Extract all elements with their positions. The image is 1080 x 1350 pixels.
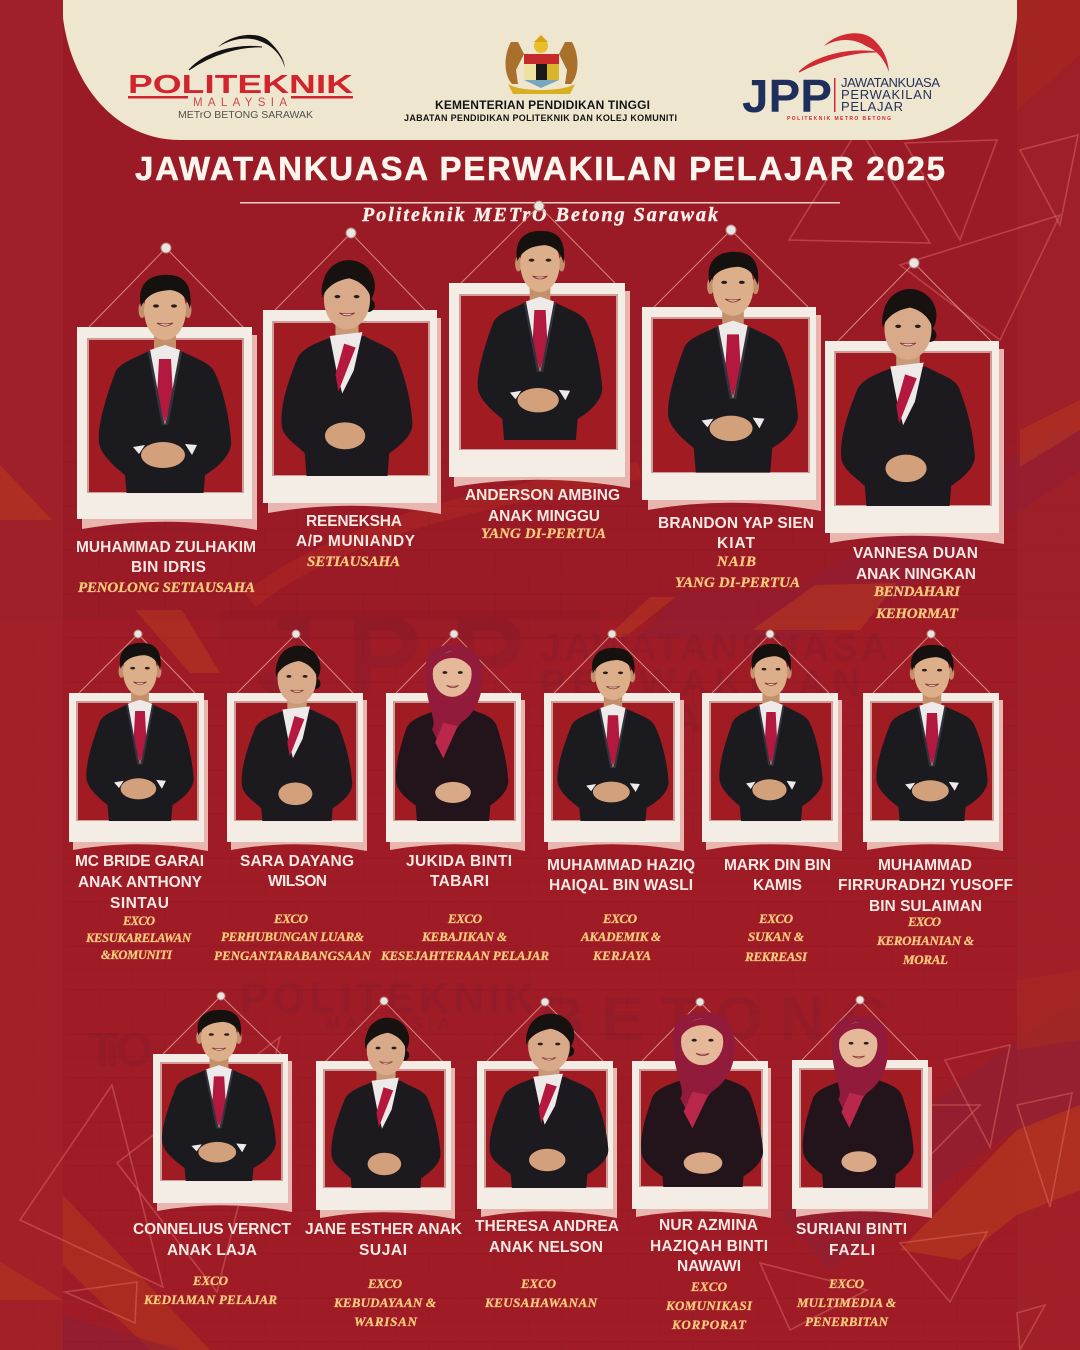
logo: JPP: [742, 33, 940, 122]
ministry text: JABATAN PENDIDIKAN POLITEKNIK DAN KOLEJ KOMUNITI: [404, 113, 677, 123]
logo: Politeknik Malaysia: [128, 35, 353, 121]
member: MC Bride Garai: EXCO: [122, 914, 155, 928]
member: Mark Din Bin Kamis: [702, 630, 842, 964]
logo: JPP: PELAJAR: [841, 99, 903, 114]
member: Jane Esther: EXCO: [367, 1276, 403, 1291]
member: Reeneksha: [263, 228, 441, 570]
member: Muhammad Zulhakim: [76, 243, 257, 596]
member: Mark Din Bin Kamis: MARK DIN BIN: [724, 857, 831, 874]
member: Jane Esther: KEBUDAYAAN &: [333, 1295, 436, 1310]
watermark: JPP logo: JPP: [255, 594, 525, 719]
member: Muhammad Zulhakim: PENOLONG SETIAUSAHA: [78, 580, 255, 596]
member: Reeneksha: A/P MUNIANDY: [296, 533, 416, 550]
member: MC Bride Garai: [69, 630, 208, 962]
member: Connelius Vernct: [133, 992, 292, 1307]
member: Muhammad Firruradhzi: BIN SULAIMAN: [869, 898, 982, 915]
member: Jukida Binti Tabari: JUKIDA BINTI: [406, 853, 512, 870]
title divider: [240, 202, 840, 204]
member: Anderson Ambing: YANG DI-PERTUA: [481, 526, 606, 542]
member: Anderson Ambing: ANDERSON AMBING: [465, 487, 620, 504]
member: Brandon Yap Sien Kiat: BRANDON YAP SIEN: [658, 515, 814, 532]
member: Anderson Ambing: ANAK MINGGU: [488, 508, 600, 525]
member: Muhammad Firruradhzi: [838, 630, 1013, 967]
member: Sara Dayang Wilson: PERHUBUNGAN LUAR&: [221, 929, 364, 944]
member: Sara Dayang Wilson: EXCO: [273, 911, 309, 926]
subtitle: Politeknik METrO Betong Sarawak: [361, 204, 718, 226]
logo: JPP: POLITEKNIK METRO BETONG: [787, 116, 891, 122]
header panel: [63, 0, 1017, 140]
member: Jukida Binti Tabari: KEBAJIKAN &: [421, 929, 507, 944]
logo: Malaysia coat of arms: [506, 35, 578, 94]
member: Muhammad Firruradhzi: KEROHANIAN &: [876, 933, 974, 948]
member: Brandon Yap Sien Kiat: NAIB: [716, 554, 756, 570]
member: Muhammad Haziq: EXCO: [602, 911, 638, 926]
ministry text: [404, 98, 677, 123]
member: Nur Azmina: NUR AZMINA: [659, 1217, 758, 1234]
member: Jane Esther: WARISAN: [354, 1314, 418, 1329]
logo: Politeknik Malaysia: METrO BETONG SARAWAK: [178, 109, 313, 121]
member: Jukida Binti Tabari: KESEJAHTERAAN PELAJAR: [380, 948, 549, 963]
watermark: JPP logo: [255, 594, 888, 741]
member: Nur Azmina: KORPORAT: [671, 1317, 747, 1332]
member: Vannesa Duan: KEHORMAT: [875, 606, 959, 622]
logo: Politeknik Malaysia: POLITEKNIK: [128, 69, 353, 99]
member: Suriani Binti Fazli: EXCO: [828, 1276, 865, 1291]
logo: JPP: PERWAKILAN: [841, 87, 932, 102]
member: Reeneksha: SETIAUSAHA: [307, 554, 400, 570]
member: Muhammad Firruradhzi: MUHAMMAD: [878, 857, 972, 874]
member: Vannesa Duan: VANNESA DUAN: [853, 545, 978, 562]
ministry text: KEMENTERIAN PENDIDIKAN TINGGI: [435, 98, 650, 112]
member: Connelius Vernct: ANAK LAJA: [167, 1242, 257, 1259]
member: Vannesa Duan: [825, 258, 1004, 622]
member: Muhammad Firruradhzi: EXCO: [907, 914, 942, 929]
watermark: JPP logo: JAWATANKUASA: [540, 627, 888, 669]
member: Muhammad Firruradhzi: MORAL: [902, 952, 948, 967]
member: Brandon Yap Sien Kiat: KIAT: [717, 535, 756, 552]
member: Theresa Andrea: ANAK NELSON: [489, 1239, 603, 1256]
member: Reeneksha: REENEKSHA: [306, 513, 402, 530]
member: MC Bride Garai: &KOMUNITI: [101, 948, 173, 962]
member: Theresa Andrea: KEUSAHAWANAN: [484, 1295, 598, 1310]
member: Mark Din Bin Kamis: REKREASI: [744, 949, 808, 964]
member: Connelius Vernct: KEDIAMAN PELAJAR: [143, 1292, 277, 1307]
member: Brandon Yap Sien Kiat: YANG DI-PERTUA: [675, 575, 800, 591]
member: Vannesa Duan: BENDAHARI: [873, 584, 961, 600]
watermark: Politeknik Malaysia: POLITEKNIK: [240, 974, 535, 1021]
member: Nur Azmina: [632, 998, 771, 1332]
member: Suriani Binti Fazli: SURIANI BINTI: [796, 1221, 907, 1238]
member: MC Bride Garai: ANAK ANTHONY: [78, 874, 203, 891]
logo: JPP: JPP: [742, 70, 832, 122]
member: Muhammad Zulhakim: MUHAMMAD ZULHAKIM: [76, 539, 256, 556]
member: Muhammad Haziq: MUHAMMAD HAZIQ: [547, 857, 695, 874]
member: Mark Din Bin Kamis: EXCO: [758, 911, 794, 926]
member: Muhammad Haziq: KERJAYA: [592, 948, 651, 963]
member: Jane Esther: JANE ESTHER ANAK: [305, 1221, 463, 1238]
watermark: Politeknik Malaysia: BETONG: [540, 985, 890, 1054]
watermark: JPP logo: PELAJAR: [540, 699, 730, 741]
member: Suriani Binti Fazli: FAZLI: [829, 1242, 875, 1259]
watermark: Politeknik Malaysia: TrO: [88, 1024, 153, 1077]
member: Jukida Binti Tabari: [380, 630, 549, 963]
member: Muhammad Haziq: [544, 630, 695, 963]
member: Mark Din Bin Kamis: SUKAN &: [748, 929, 804, 944]
member: Theresa Andrea: EXCO: [520, 1276, 557, 1291]
member: Jane Esther: [305, 997, 463, 1329]
member: Theresa Andrea: [475, 998, 619, 1310]
member: Sara Dayang Wilson: [214, 630, 372, 963]
member: Sara Dayang Wilson: PENGANTARABANGSAAN: [214, 948, 372, 963]
watermark: Politeknik Malaysia: MALAYSIA: [325, 1014, 450, 1034]
title: JAWATANKUASA PERWAKILAN PELAJAR 2025: [135, 150, 945, 187]
watermark: Politeknik Malaysia: [88, 974, 890, 1077]
member: MC Bride Garai: KESUKARELAWAN: [85, 931, 192, 945]
member: Nur Azmina: KOMUNIKASI: [665, 1298, 753, 1313]
member: Jane Esther: SUJAI: [359, 1242, 407, 1259]
member: Jukida Binti Tabari: EXCO: [447, 911, 483, 926]
member: Theresa Andrea: THERESA ANDREA: [475, 1218, 619, 1235]
member: Muhammad Haziq: AKADEMIK &: [580, 929, 661, 944]
logo: JPP: JAWATANKUASA: [841, 75, 940, 90]
member: Muhammad Haziq: HAIQAL BIN WASLI: [549, 877, 693, 894]
member: Anderson Ambing: [449, 201, 630, 542]
member: Vannesa Duan: ANAK NINGKAN: [856, 566, 976, 583]
member: Suriani Binti Fazli: PENERBITAN: [805, 1314, 889, 1329]
member: Jukida Binti Tabari: TABARI: [430, 873, 489, 890]
member: Muhammad Zulhakim: BIN IDRIS: [131, 559, 206, 576]
member: Mark Din Bin Kamis: KAMIS: [753, 877, 802, 894]
member: Nur Azmina: HAZIQAH BINTI: [650, 1238, 768, 1255]
member: Suriani Binti Fazli: [792, 996, 932, 1329]
member: Sara Dayang Wilson: WILSON: [268, 873, 327, 890]
member: MC Bride Garai: SINTAU: [110, 895, 169, 912]
member: Nur Azmina: NAWAWI: [677, 1258, 741, 1275]
member: Nur Azmina: EXCO: [690, 1279, 728, 1294]
member: Sara Dayang Wilson: SARA DAYANG: [240, 853, 354, 870]
member: Suriani Binti Fazli: MULTIMEDIA &: [796, 1295, 896, 1310]
member: Muhammad Firruradhzi: FIRRURADHZI YUSOFF: [838, 877, 1013, 894]
member: Connelius Vernct: EXCO: [192, 1273, 229, 1288]
logo: Politeknik Malaysia: MALAYSIA: [193, 97, 287, 109]
member: Brandon Yap Sien Kiat: [642, 225, 821, 591]
member: Connelius Vernct: CONNELIUS VERNCT: [133, 1221, 292, 1238]
member: MC Bride Garai: MC BRIDE GARAI: [75, 853, 204, 870]
watermark: JPP logo: PERWAKILAN: [540, 663, 860, 705]
